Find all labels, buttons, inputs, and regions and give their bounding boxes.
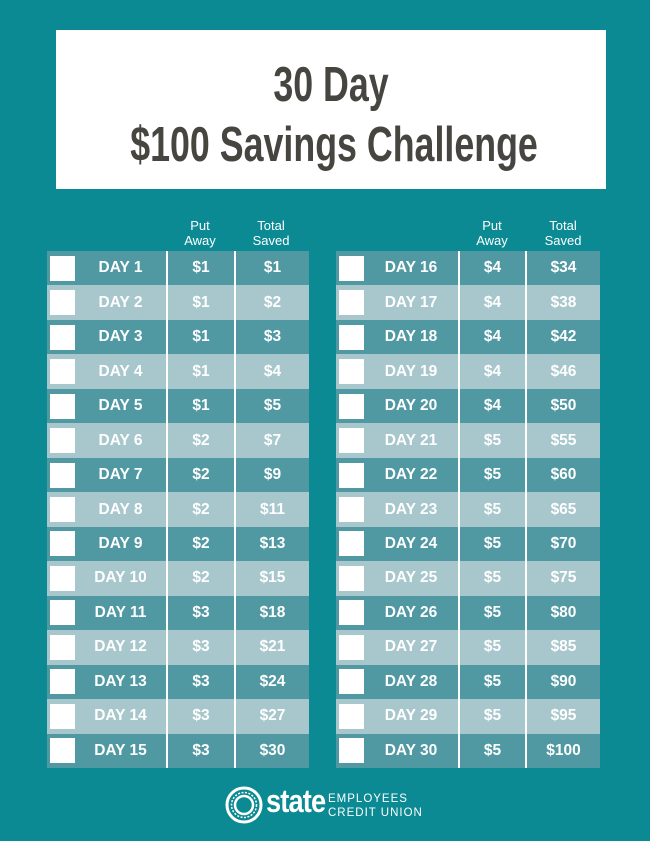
table: days 1-15: $7 [264,432,281,449]
header: right total saved: Total [549,218,577,233]
table: days 16-30: $46 [551,363,576,380]
table: days 1-15: DAY 2 [99,294,142,311]
table: days 1-15: DAY 7 [99,466,142,483]
table: days 16-30: DAY 19 [385,363,437,380]
header: left total saved [253,218,289,248]
table: days 16-30: $85 [551,638,576,655]
table: days 16-30: DAY 22 [385,466,437,483]
table: days 1-15: $2 [192,466,210,483]
table: days 16-30: DAY 30 [385,742,437,759]
table: days 1-15: $13 [260,535,285,552]
table: days 1-15: $3 [192,604,210,621]
table: days 1-15: $1 [192,294,210,311]
table: days 16-30: $5 [484,673,501,690]
table: days 16-30: $70 [551,535,576,552]
table: days 1-15: $9 [264,466,281,483]
table: days 1-15: DAY 15 [94,742,147,759]
table: days 16-30: $4 [484,259,501,276]
table: days 1-15: $21 [260,638,285,655]
title: $100 Savings Challenge [130,118,538,172]
table: days 16-30: $80 [551,604,576,621]
table: days 1-15: $3 [192,673,210,690]
table: days 16-30: DAY 23 [385,501,437,518]
table: days 1-15: $1 [192,328,210,345]
table: days 1-15: $3 [192,707,210,724]
table: days 16-30: $50 [551,397,576,414]
title: 30 Day [273,58,389,112]
logo wordmark: state [266,783,325,819]
table: days 1-15: $3 [192,742,210,759]
table: days 1-15: $2 [264,294,281,311]
table: days 1-15: DAY 11 [95,604,146,621]
table: days 16-30: $5 [484,638,501,655]
logo subtitle [328,793,423,819]
table: days 1-15: DAY 8 [99,501,142,518]
table: days 1-15: DAY 6 [99,432,142,449]
table: days 16-30: $4 [484,363,501,380]
table: days 16-30: DAY 26 [385,604,437,621]
table: days 1-15 [47,251,309,768]
table: days 1-15: $1 [192,397,210,414]
header: right total saved [545,218,581,248]
logo subtitle: EMPLOYEES [328,793,408,805]
table: days 1-15: $18 [260,604,285,621]
table: days 16-30: $38 [551,294,576,311]
table: days 16-30: $42 [551,328,576,345]
table: days 1-15: DAY 14 [94,707,147,724]
header: right put away: Put [482,218,502,233]
table: days 1-15: $2 [192,432,210,449]
table: days 1-15: $5 [264,397,281,414]
table: days 1-15: $4 [264,363,281,380]
table: days 16-30: $5 [484,569,501,586]
table: days 1-15: $2 [192,535,210,552]
header: left put away: Away [184,233,216,248]
header: left put away [184,218,216,248]
table: days 1-15: DAY 10 [94,569,147,586]
logo [226,783,423,824]
table: days 16-30: $5 [484,535,501,552]
table: days 1-15: $2 [192,501,210,518]
table: days 1-15: DAY 3 [99,328,142,345]
table: days 16-30: $5 [484,501,501,518]
table: days 16-30: $65 [551,501,576,518]
table: days 1-15: $11 [260,501,285,518]
icon: logo ring [226,786,262,824]
table: days 1-15: DAY 9 [99,535,142,552]
table: days 16-30: $5 [484,604,501,621]
table: days 16-30: $4 [484,328,501,345]
table: days 1-15: $3 [264,328,281,345]
table: days 16-30: DAY 20 [385,397,437,414]
table: days 1-15: DAY 4 [99,363,142,380]
header: right put away [476,218,508,248]
header: left put away: Put [190,218,210,233]
table: days 1-15: $24 [260,673,285,690]
table: days 16-30: $60 [551,466,576,483]
table: days 1-15: DAY 13 [94,673,147,690]
table: days 16-30: DAY 21 [385,432,437,449]
table: days 16-30: $55 [551,432,576,449]
table: days 1-15: $27 [260,707,285,724]
table: days 1-15: DAY 12 [94,638,147,655]
table: days 1-15: DAY 5 [99,397,142,414]
table: days 16-30: DAY 27 [385,638,437,655]
table: days 16-30: $5 [484,742,501,759]
logo subtitle: CREDIT UNION [328,807,423,819]
table: days 1-15: $1 [264,259,281,276]
table: days 16-30: DAY 29 [385,707,437,724]
table: days 16-30: $90 [551,673,576,690]
table: days 16-30: DAY 28 [385,673,437,690]
header: left total saved: Total [257,218,285,233]
table: days 16-30: DAY 18 [385,328,437,345]
table: days 1-15: $1 [192,363,210,380]
table: days 1-15: $2 [192,569,210,586]
table: days 1-15: DAY 1 [99,259,142,276]
table: days 16-30: DAY 16 [385,259,437,276]
table: days 16-30: $4 [484,294,501,311]
table: days 16-30: $100 [546,742,581,759]
table: days 16-30: $34 [551,259,576,276]
table: days 1-15: $1 [192,259,210,276]
table: days 16-30: DAY 17 [385,294,437,311]
header: right total saved: Saved [545,233,581,248]
title [56,30,606,189]
header: left total saved: Saved [253,233,289,248]
table: days 16-30: $5 [484,466,501,483]
table: days 16-30: $5 [484,432,501,449]
table: days 16-30: $75 [551,569,576,586]
table: days 1-15: $30 [260,742,285,759]
table: days 16-30: DAY 25 [385,569,437,586]
table: days 16-30: $5 [484,707,501,724]
table: days 1-15: $15 [260,569,285,586]
table: days 16-30 [336,251,600,768]
table: days 1-15: $3 [192,638,210,655]
table: days 16-30: DAY 24 [385,535,437,552]
table: days 16-30: $95 [551,707,576,724]
header: right put away: Away [476,233,508,248]
table: days 16-30: $4 [484,397,501,414]
